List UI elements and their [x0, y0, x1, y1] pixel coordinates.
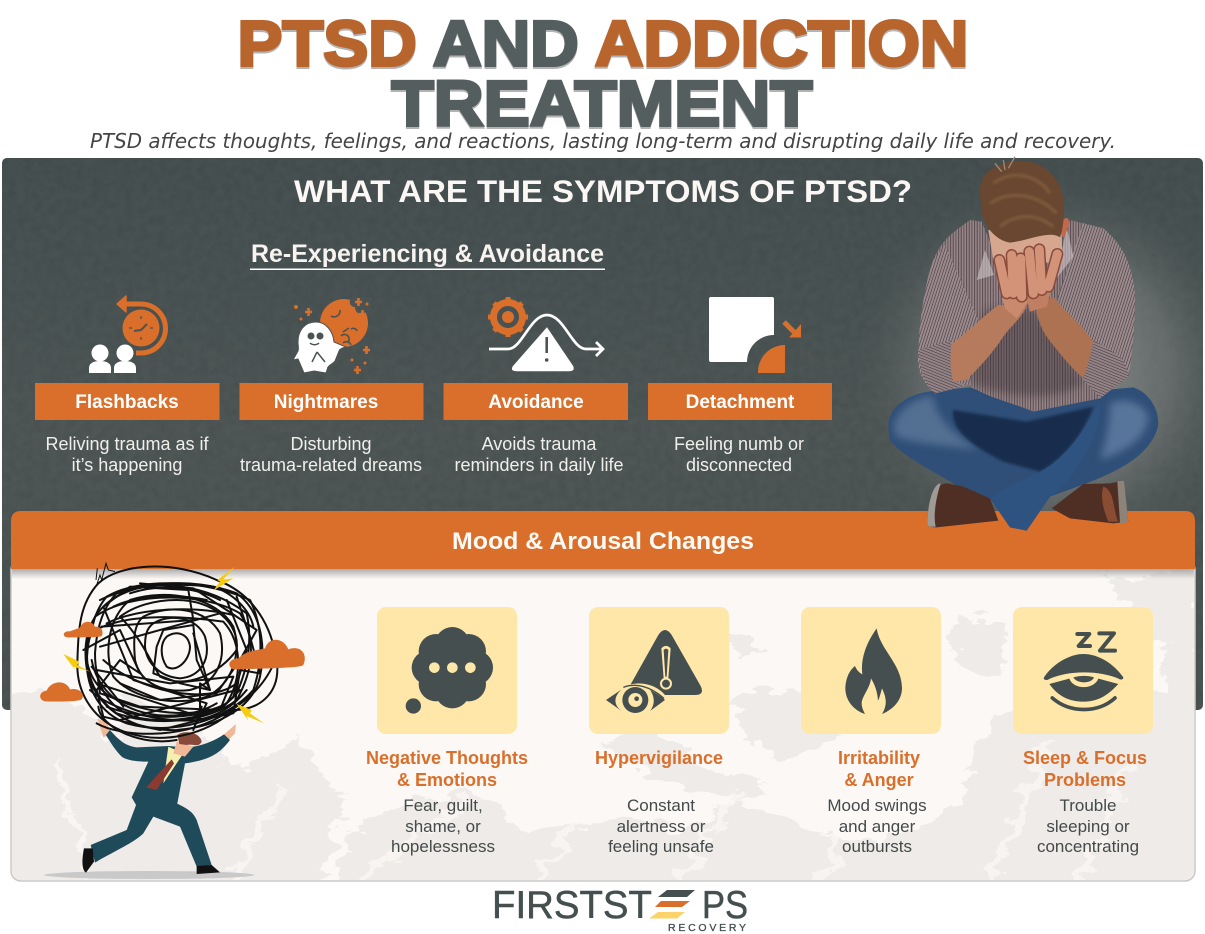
shoes	[927, 483, 998, 527]
scribble	[77, 567, 277, 741]
suit	[106, 730, 230, 809]
face	[988, 230, 1063, 263]
hands	[998, 283, 1027, 318]
icon: detachment shapes	[709, 297, 801, 373]
icon: flame	[801, 607, 941, 734]
card: negative thoughts and emotions: Fear, guilt,	[403, 796, 483, 815]
title: PTSD AND ADDICTION	[238, 8, 968, 80]
card: flashbacks: it’s happening	[72, 455, 182, 475]
card: hypervigilance: alertness or	[617, 817, 706, 836]
card: negative thoughts and emotions: & Emotions	[397, 770, 497, 790]
card: avoidance	[444, 383, 628, 475]
subtitle: PTSD affects thoughts, feelings, and reactions, lasting long-term and disrupting daily life and recovery.	[90, 129, 1116, 153]
icon: warning eye	[589, 607, 729, 734]
header: mood and arousal changes: Mood & Arousal Changes	[452, 528, 754, 555]
card: negative thoughts and emotions: hopelessness	[391, 837, 495, 856]
shadow	[44, 871, 254, 879]
card: sleep and focus problems: Sleep & Focus	[1023, 748, 1147, 768]
clouds	[64, 622, 103, 637]
card: avoidance: Avoidance	[488, 392, 584, 413]
logo: first steps recovery	[492, 884, 748, 934]
card: negative thoughts and emotions	[366, 607, 528, 856]
card: detachment: disconnected	[686, 455, 792, 475]
icon: thought cloud	[377, 607, 517, 734]
card: flashbacks: Reliving trauma as if	[45, 434, 210, 454]
panel: symptoms background	[2, 158, 1203, 710]
card: irritability and anger: Irritability	[838, 748, 920, 768]
illustration: man carrying tangled scribble	[40, 563, 305, 879]
card: sleep and focus problems: concentrating	[1037, 837, 1139, 856]
forearms	[950, 305, 1027, 382]
icon: avoidance gear and warning	[488, 297, 603, 372]
card: nightmares: Disturbing	[290, 434, 372, 454]
card: sleep and focus problems: sleeping or	[1046, 817, 1130, 836]
sleeve cuffs	[918, 340, 967, 393]
card: detachment: Detachment	[686, 392, 795, 413]
card: hypervigilance: Constant	[627, 796, 695, 815]
card: negative thoughts and emotions: Negative Thoughts	[366, 748, 528, 768]
card: flashbacks	[35, 383, 220, 475]
hair	[980, 161, 1064, 243]
shoes	[82, 848, 94, 873]
heading: symptoms: WHAT ARE THE SYMPTOMS OF PTSD?	[294, 173, 912, 209]
title: PTSD AND ADDICTION	[238, 10, 969, 82]
card: nightmares: trauma-related dreams	[240, 455, 422, 475]
logo: first steps recovery: FIRSTST	[492, 884, 652, 927]
card: hypervigilance	[589, 607, 729, 856]
header: mood and arousal changes	[11, 511, 1195, 569]
panel: mood and arousal background	[0, 560, 1205, 900]
illustration: man covering his face	[888, 157, 1158, 531]
logo: first steps recovery: PS	[702, 884, 748, 927]
shirt and tie	[163, 747, 183, 783]
card: flashbacks: Flashbacks	[75, 392, 179, 413]
card: avoidance: reminders in daily life	[454, 455, 624, 475]
card: nightmares: Nightmares	[274, 392, 378, 413]
card: hypervigilance: Hypervigilance	[595, 748, 723, 768]
card: irritability and anger: Mood swings	[827, 796, 927, 815]
card: sleep and focus problems	[1013, 607, 1153, 856]
icon: nightmares ghost and moon	[293, 297, 372, 374]
lightning	[213, 567, 235, 591]
card: irritability and anger	[801, 607, 941, 856]
logo: first steps recovery: RECOVERY	[668, 922, 746, 934]
card: hypervigilance: feeling unsafe	[608, 837, 714, 856]
hands	[97, 718, 111, 737]
card: avoidance: Avoids trauma	[482, 434, 597, 454]
icon: sleepy eye	[1013, 607, 1153, 734]
card: negative thoughts and emotions: shame, or	[405, 817, 481, 836]
jeans	[888, 387, 1158, 531]
shirt	[918, 220, 1135, 412]
title: TREATMENT	[392, 70, 812, 142]
title: TREATMENT	[392, 68, 812, 140]
head	[173, 742, 193, 757]
card: nightmares	[240, 383, 424, 475]
title	[238, 8, 969, 142]
card: irritability and anger: and anger	[839, 817, 916, 836]
card: irritability and anger: outbursts	[842, 837, 912, 856]
card: detachment	[648, 383, 832, 475]
card: sleep and focus problems: Problems	[1044, 770, 1126, 790]
card: detachment: Feeling numb or	[674, 434, 804, 454]
subheading: re-experiencing and avoidance: Re-Experiencing & Avoidance	[251, 240, 604, 268]
card: sleep and focus problems: Trouble	[1059, 796, 1117, 815]
card: irritability and anger: & Anger	[844, 770, 914, 790]
icon: flashbacks clock and people	[89, 296, 166, 373]
